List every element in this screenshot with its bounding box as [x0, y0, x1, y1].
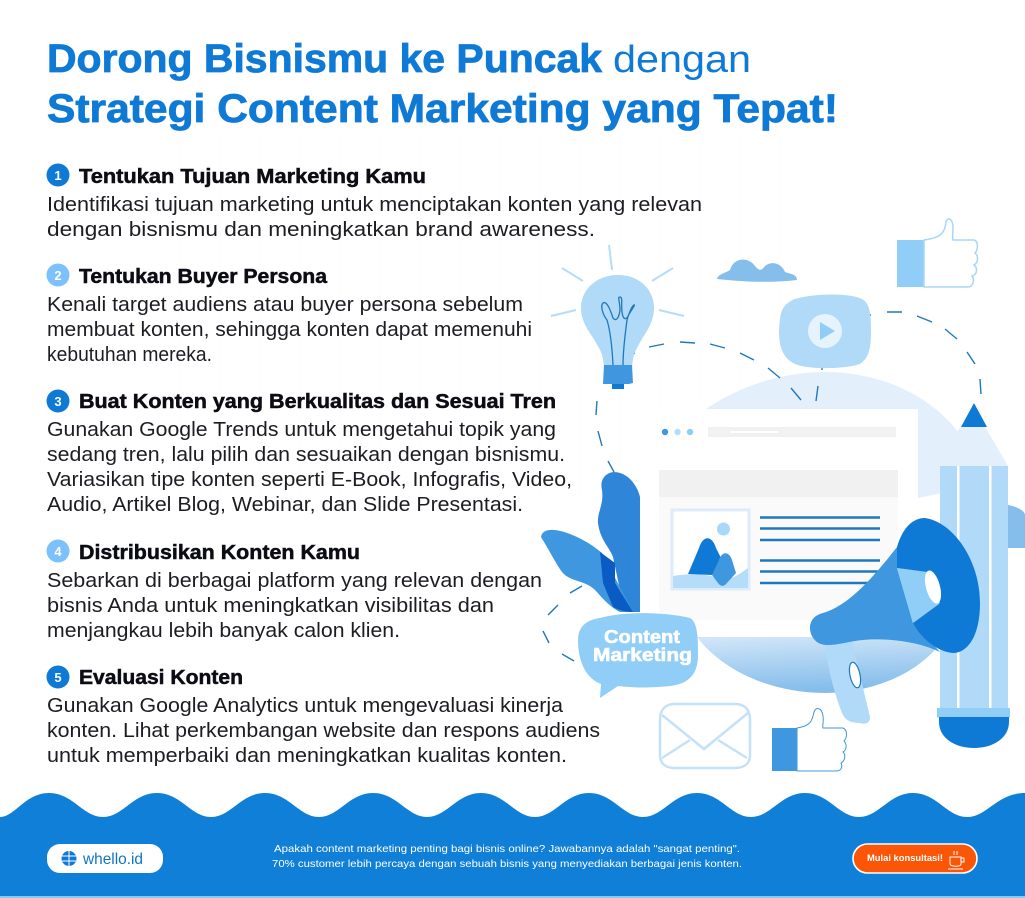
title: dengan — [613, 39, 751, 81]
step 1 text block: Tentukan Tujuan Marketing Kamu — [79, 166, 426, 188]
image placeholder — [672, 510, 749, 589]
number badge 5 — [46, 666, 70, 688]
footer note: 70% customer lebih percaya dengan sebuah bisnis yang menyediakan berbagai jenis konten. — [272, 858, 742, 870]
step 5 text block — [46, 666, 600, 767]
browser window — [640, 409, 918, 637]
step 3 text block: Buat Konten yang Berkualitas dan Sesuai Tren — [79, 391, 556, 413]
icon: cloud — [717, 260, 797, 282]
number badge 1 — [46, 164, 70, 186]
consult button — [853, 844, 977, 873]
dashed connector lines — [543, 312, 981, 661]
number badge 2 — [46, 264, 70, 286]
step 1 text block: dengan bisnismu dan meningkatkan brand awareness. — [47, 219, 595, 241]
logo pill — [47, 844, 163, 873]
icon: megaphone — [810, 518, 980, 724]
step 4 text block: bisnis Anda untuk meningkatkan visibilitas dan — [47, 595, 494, 617]
side tab — [1008, 505, 1025, 548]
consult button: Mulai konsultasi! — [867, 853, 943, 864]
step 2 text block: Kenali target audiens atau buyer persona sebelum — [47, 294, 523, 316]
number badge 4: 4 — [54, 544, 62, 559]
icon: thumbs up bottom — [772, 709, 846, 771]
step 2 text block: membuat konten, sehingga konten dapat memenuhi — [47, 319, 532, 341]
step 3 text block: Variasikan tipe konten seperti E-Book, Infografis, Video, — [47, 469, 572, 491]
step 2 text block — [46, 264, 532, 366]
icon: plant leaves — [541, 472, 640, 612]
logo pill: whello.id — [82, 851, 143, 868]
step 4 text block — [46, 540, 542, 642]
footer note — [272, 843, 742, 870]
title: Dorong Bisnismu ke Puncak — [47, 37, 603, 81]
step 5 text block: Gunakan Google Analytics untuk mengevaluasi kinerja — [47, 695, 564, 717]
step 3 text block: Audio, Artikel Blog, Webinar, dan Slide Presentasi. — [47, 494, 523, 516]
speech bubble: Content — [604, 627, 680, 647]
number badge 1: 1 — [54, 168, 62, 183]
step 1 text block: Identifikasi tujuan marketing untuk menciptakan konten yang relevan — [47, 194, 702, 216]
step 4 text block: Distribusikan Konten Kamu — [79, 542, 360, 564]
speech bubble: Marketing — [593, 645, 692, 665]
footer note: Apakah content marketing penting bagi bisnis online? Jawabannya adalah "sangat penting". — [274, 843, 740, 855]
title — [47, 37, 838, 131]
text lines — [760, 518, 880, 583]
icon: pencil — [937, 403, 1010, 748]
speech bubble — [578, 613, 698, 698]
step 2 text block: kebutuhan mereka. — [47, 344, 212, 366]
step 3 text block — [46, 390, 572, 516]
number badge 4 — [46, 540, 70, 562]
hill and bowl background — [697, 372, 958, 693]
icon: envelope — [660, 704, 750, 768]
step 3 text block: sedang tren, lalu pilih dan sesuaikan dengan bisnismu. — [47, 444, 565, 466]
footer band — [0, 793, 1025, 898]
number badge 3: 3 — [54, 394, 62, 409]
step 5 text block: untuk memperbaiki dan meningkatkan kualitas konten. — [47, 745, 567, 767]
illustration — [541, 219, 1025, 771]
step 5 text block: konten. Lihat perkembangan website dan respons audiens — [47, 720, 600, 742]
icon: video play — [779, 294, 871, 368]
icon: thumbs up top — [897, 219, 978, 287]
step 4 text block: Sebarkan di berbagai platform yang relevan dengan — [47, 570, 542, 592]
icon: light bulb — [551, 245, 684, 389]
step 4 text block: menjangkau lebih banyak calon klien. — [47, 620, 400, 642]
step 1 text block — [46, 164, 702, 241]
number badge 3 — [46, 390, 70, 412]
wave background — [0, 793, 1025, 896]
number badge 5: 5 — [54, 670, 62, 685]
title: Strategi Content Marketing yang Tepat! — [47, 87, 838, 131]
step 5 text block: Evaluasi Konten — [79, 667, 243, 689]
number badge 2: 2 — [54, 268, 62, 283]
step 2 text block: Tentukan Buyer Persona — [79, 266, 328, 288]
step 3 text block: Gunakan Google Trends untuk mengetahui topik yang — [47, 419, 556, 441]
